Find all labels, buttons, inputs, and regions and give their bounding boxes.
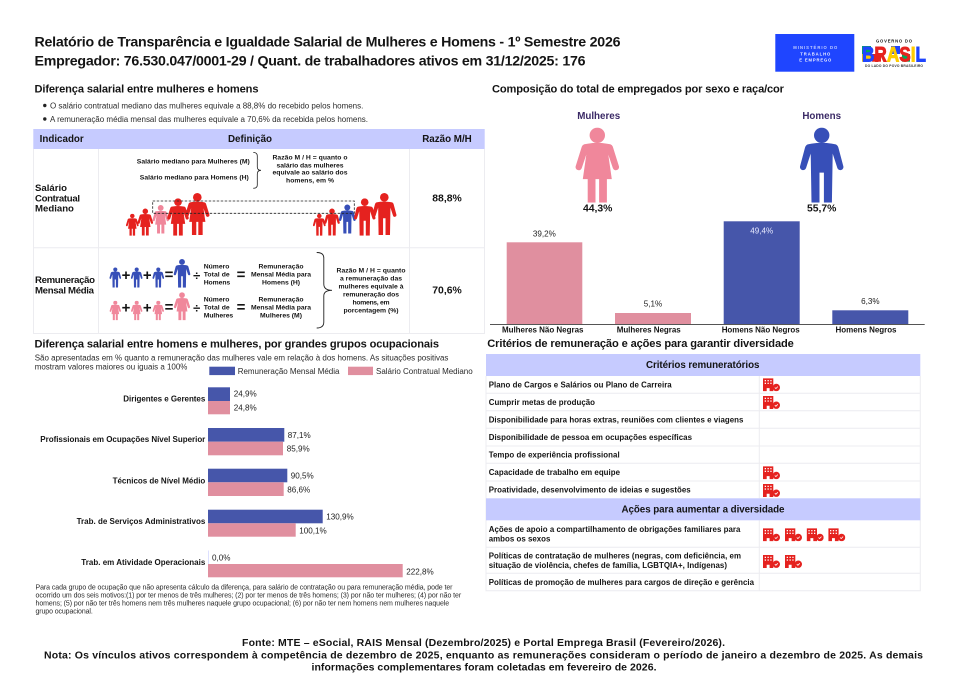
bar: Mulheres Negras (615, 300, 691, 335)
panel: composição (490, 84, 925, 335)
heading: composição: Composição do total de empregados por sexo e raça/cor (492, 84, 785, 96)
men formula: Total de (204, 272, 230, 279)
row: Salário Contratual Mediano (35, 152, 462, 236)
bar: Homens Negros: 6,3% (861, 297, 880, 306)
women formula: + (122, 300, 131, 317)
group: Técnicos: 90,5% (291, 472, 314, 481)
men pictogram (800, 111, 843, 215)
women formula: Total de (204, 304, 230, 311)
description: São apresentadas em % quanto a remuneração das mulheres vale em relação à dos homens. As situações positivas (35, 353, 448, 362)
ratio explanation (272, 154, 348, 185)
indicator label: Mensal Média (35, 286, 95, 297)
group: Serviços Administrativos: 100,1% (299, 526, 327, 535)
ratio explanation: porcentagem (%) (344, 307, 398, 314)
indicator label: Mediano (35, 204, 74, 215)
logo: Ministério do Trabalho e Emprego (775, 34, 854, 72)
men formula: = (237, 266, 246, 283)
men formula: + (122, 267, 131, 284)
footnote: homens; (5) por não ter três homens nem três mulheres naquele grupo ocupacional; (6) por não ter nem homens nem mulheres naquele (36, 600, 449, 607)
footer note: Nota: Os vínculos ativos correspondem à competência de dezembro de 2025, enquanto as remunerações consideram o período de janeiro a dezembro de 2025. As demais (44, 650, 923, 662)
panel: critérios (486, 338, 920, 591)
value: 88,8% (432, 193, 462, 204)
group: Técnicos: 86,6% (287, 485, 310, 494)
women formula: = (165, 299, 174, 316)
women figures (126, 193, 209, 236)
men formula (109, 259, 311, 288)
definition labels: Salário mediano para Homens (H) (140, 174, 249, 181)
ratio explanation: Razão M / H = quanto (336, 268, 406, 275)
men formula: Homens (H) (262, 280, 300, 287)
row: proatividade (489, 484, 780, 497)
definition labels (137, 158, 250, 181)
logo: Governo do Brasil: BRASIL (862, 43, 926, 66)
group: Profissionais: Profissionais em Ocupações Nível Superior (40, 435, 205, 444)
logo: Ministério do Trabalho e Emprego: E EMPREGO (799, 58, 832, 62)
women formula: Remuneração (258, 296, 304, 303)
group: Atividade Operacionais: 222,8% (406, 567, 434, 576)
women formula (110, 292, 311, 320)
ratio explanation: salário das mulheres (276, 162, 344, 169)
heading: critérios: Critérios de remuneração e ações para garantir diversidade (487, 338, 794, 350)
footnote (36, 584, 462, 616)
women formula: = (237, 299, 246, 316)
men formula: = (165, 266, 174, 283)
bullet list: O salário contratual mediano das mulheres equivale a 88,8% do recebido pelos homens. (50, 102, 363, 110)
indicator label (35, 183, 80, 215)
ratio explanation: remuneração dos (343, 291, 399, 298)
indicator label: Contratual (35, 193, 80, 204)
bar: Mulheres Negras: 5,1% (644, 300, 662, 309)
row: metas: Cumprir metas de produção (489, 398, 595, 407)
row: plano de cargos (489, 378, 780, 391)
bullet list: A remuneração média mensal das mulheres equivale a 70,6% da recebida pelos homens. (50, 115, 368, 124)
bar: Mulheres Negras: Mulheres Negras (617, 326, 681, 335)
group: Serviços Administrativos: 130,9% (326, 513, 354, 522)
women formula: Número (204, 296, 229, 303)
row: metas (489, 396, 780, 409)
group: Profissionais: 85,9% (287, 444, 310, 453)
row: obrigações familiares: ambos os sexos (489, 534, 551, 543)
bar chart: grupos ocupacionais (40, 387, 434, 577)
bullet list (43, 102, 368, 124)
group: Dirigentes e Gerentes: 24,8% (234, 403, 257, 412)
title: Empregador: 76.530.047/0001-29 / Quant. de trabalhadores ativos em 31/12/2025: 176 (34, 54, 586, 70)
footer note: Fonte: MTE – eSocial, RAIS Mensal (Dezembro/2025) e Portal Emprega Brasil (Fevereiro/2026). (242, 637, 725, 649)
row: ocupações específicas: Disponibilidade de pessoa em ocupações específicas (489, 433, 693, 442)
women pictogram (576, 111, 621, 215)
ratio explanation: mulheres equivale à (338, 283, 404, 290)
brace (253, 152, 261, 188)
women pictogram: Mulheres (577, 111, 621, 122)
women formula: Mensal Média para (251, 304, 311, 311)
row: contratação (489, 552, 802, 570)
value: 70,6% (432, 286, 462, 297)
women pictogram: 44,3% (583, 204, 612, 215)
logo: Governo do Brasil: GOVERNO DO (876, 39, 913, 44)
footnote: grupo ocupacional. (36, 609, 93, 616)
panel: grupos ocupacionais (34, 338, 473, 616)
row: promoção: Políticas de promoção de mulheres para cargos de direção e gerência (489, 578, 755, 587)
median dashed box (153, 201, 354, 213)
legend: Remuneração Mensal Média (238, 367, 340, 376)
group: Atividade Operacionais: 0,0% (212, 554, 230, 563)
men pictogram: Homens (802, 111, 842, 122)
group: Técnicos (113, 469, 314, 496)
group: Serviços Administrativos (77, 510, 354, 537)
row: Remuneração Mensal Média (35, 252, 462, 328)
header: critérios remuneratórios: Critérios remuneratórios (646, 360, 760, 371)
heading: diferença salarial: Diferença salarial entre mulheres e homens (34, 84, 258, 96)
row: contratação: situação de violência, chefes de família, LGBTQIA+, Indígenas) (489, 561, 727, 570)
brace (317, 252, 332, 328)
row: proatividade: Proatividade, desenvolvimento de ideias e sugestões (489, 486, 691, 495)
group: Atividade Operacionais (81, 550, 434, 577)
definition labels: Salário mediano para Mulheres (M) (137, 158, 250, 165)
men formula: Mensal Média para (251, 272, 311, 279)
indicator label (35, 275, 95, 297)
description: mostram valores maiores ou iguais a 100% (35, 363, 187, 372)
header: ações diversidade (486, 498, 920, 520)
men formula: Número (204, 264, 229, 271)
women formula: Mulheres (204, 312, 233, 319)
row: equipe (489, 466, 780, 479)
row: equipe: Capacidade de trabalho em equipe (489, 468, 621, 477)
bar: Homens Não Negros: 49,4% (750, 227, 773, 236)
group: Profissionais: 87,1% (288, 431, 311, 440)
women formula: + (143, 300, 152, 317)
row: obrigações familiares (489, 525, 845, 543)
panel: diferença salarial (33, 84, 485, 334)
row: horas extras: Disponibilidade para horas extras, reuniões com clientes e viagens (489, 415, 744, 424)
footer note: informações complementares foram coletadas em fevereiro de 2026. (312, 662, 657, 674)
logo: Ministério do Trabalho e Emprego: MINISTÉRIO DO (793, 45, 838, 50)
header: ações diversidade: Ações para aumentar a diversidade (622, 505, 785, 516)
group: Profissionais (40, 428, 311, 455)
description (35, 353, 448, 372)
bar: Homens Não Negros (722, 221, 800, 335)
footnote: Para cada grupo de ocupação que não apresenta cálculo da diferença, para salário de contratação ou para remuneração média, pode ter (36, 584, 453, 591)
row: plano de cargos: Plano de Cargos e Salários ou Plano de Carreira (489, 380, 672, 389)
row: contratação: Políticas de contratação de mulheres (negras, com deficiência, em (489, 552, 741, 561)
legend (209, 367, 473, 376)
indicator label: Salário (35, 183, 67, 194)
ratio explanation: Razão M / H = quanto o (272, 154, 348, 161)
footnote: ocorrido um dos seis motivos:(1) por ter menos de três mulheres; (2) por ter menos de três homens; (3) por não ter mulheres; (4) por não ter (36, 592, 462, 599)
logo: Governo do Brasil: DO LADO DO POVO BRASILEIRO (865, 64, 923, 68)
ratio explanation: homens, em % (286, 178, 334, 185)
ratio explanation (336, 268, 406, 314)
footer note (44, 637, 923, 674)
group: Dirigentes e Gerentes: 24,9% (234, 390, 257, 399)
bar: Homens Negros: Homens Negros (836, 326, 897, 335)
bar: Homens Não Negros: Homens Não Negros (722, 326, 800, 335)
men formula: + (143, 267, 152, 284)
women formula: ÷ (193, 301, 200, 316)
men formula: Homens (204, 280, 230, 287)
men pictogram: 55,7% (807, 204, 836, 215)
header: critérios remuneratórios (486, 354, 920, 376)
table header: Definição (228, 134, 272, 145)
group: Técnicos: Técnicos de Nível Médio (113, 476, 205, 485)
title (34, 34, 621, 70)
title: Relatório de Transparência e Igualdade Salarial de Mulheres e Homens - 1º Semestre 2026 (34, 34, 621, 50)
row: experiência: Tempo de experiência profissional (489, 451, 620, 460)
heading: grupos ocupacionais: Diferença salarial entre homens e mulheres, por grandes grupos ocupacionais (34, 338, 439, 350)
group: Atividade Operacionais: Trab. em Atividade Operacionais (81, 558, 206, 567)
bar: Mulheres Não Negras: Mulheres Não Negras (502, 326, 584, 335)
bar: Mulheres Não Negras (502, 229, 584, 335)
bar chart: composição (490, 221, 925, 335)
legend: Salário Contratual Mediano (376, 367, 473, 376)
ratio explanation: homens, em (352, 299, 390, 306)
bar: Homens Negros (832, 297, 908, 335)
men formula: Remuneração (258, 264, 304, 271)
table header: Indicador (40, 134, 84, 145)
table header: Razão M/H (422, 134, 472, 145)
row: obrigações familiares: Ações de apoio a compartilhamento de obrigações familiares para (489, 525, 741, 534)
group: Dirigentes e Gerentes (123, 387, 257, 414)
table header (33, 129, 485, 149)
men formula: ÷ (193, 268, 200, 283)
group: Serviços Administrativos: Trab. de Serviços Administrativos (77, 517, 206, 526)
logo: Ministério do Trabalho e Emprego: TRABALHO (800, 52, 831, 56)
indicator label: Remuneração (35, 275, 95, 286)
bar: Mulheres Não Negras: 39,2% (533, 229, 556, 238)
group: Dirigentes e Gerentes: Dirigentes e Gerentes (123, 394, 206, 403)
ratio explanation: a remuneração das (340, 276, 402, 283)
ratio explanation: equivale ao salário dos (272, 170, 348, 177)
men figures (313, 193, 396, 236)
women formula: Mulheres (M) (260, 312, 302, 319)
